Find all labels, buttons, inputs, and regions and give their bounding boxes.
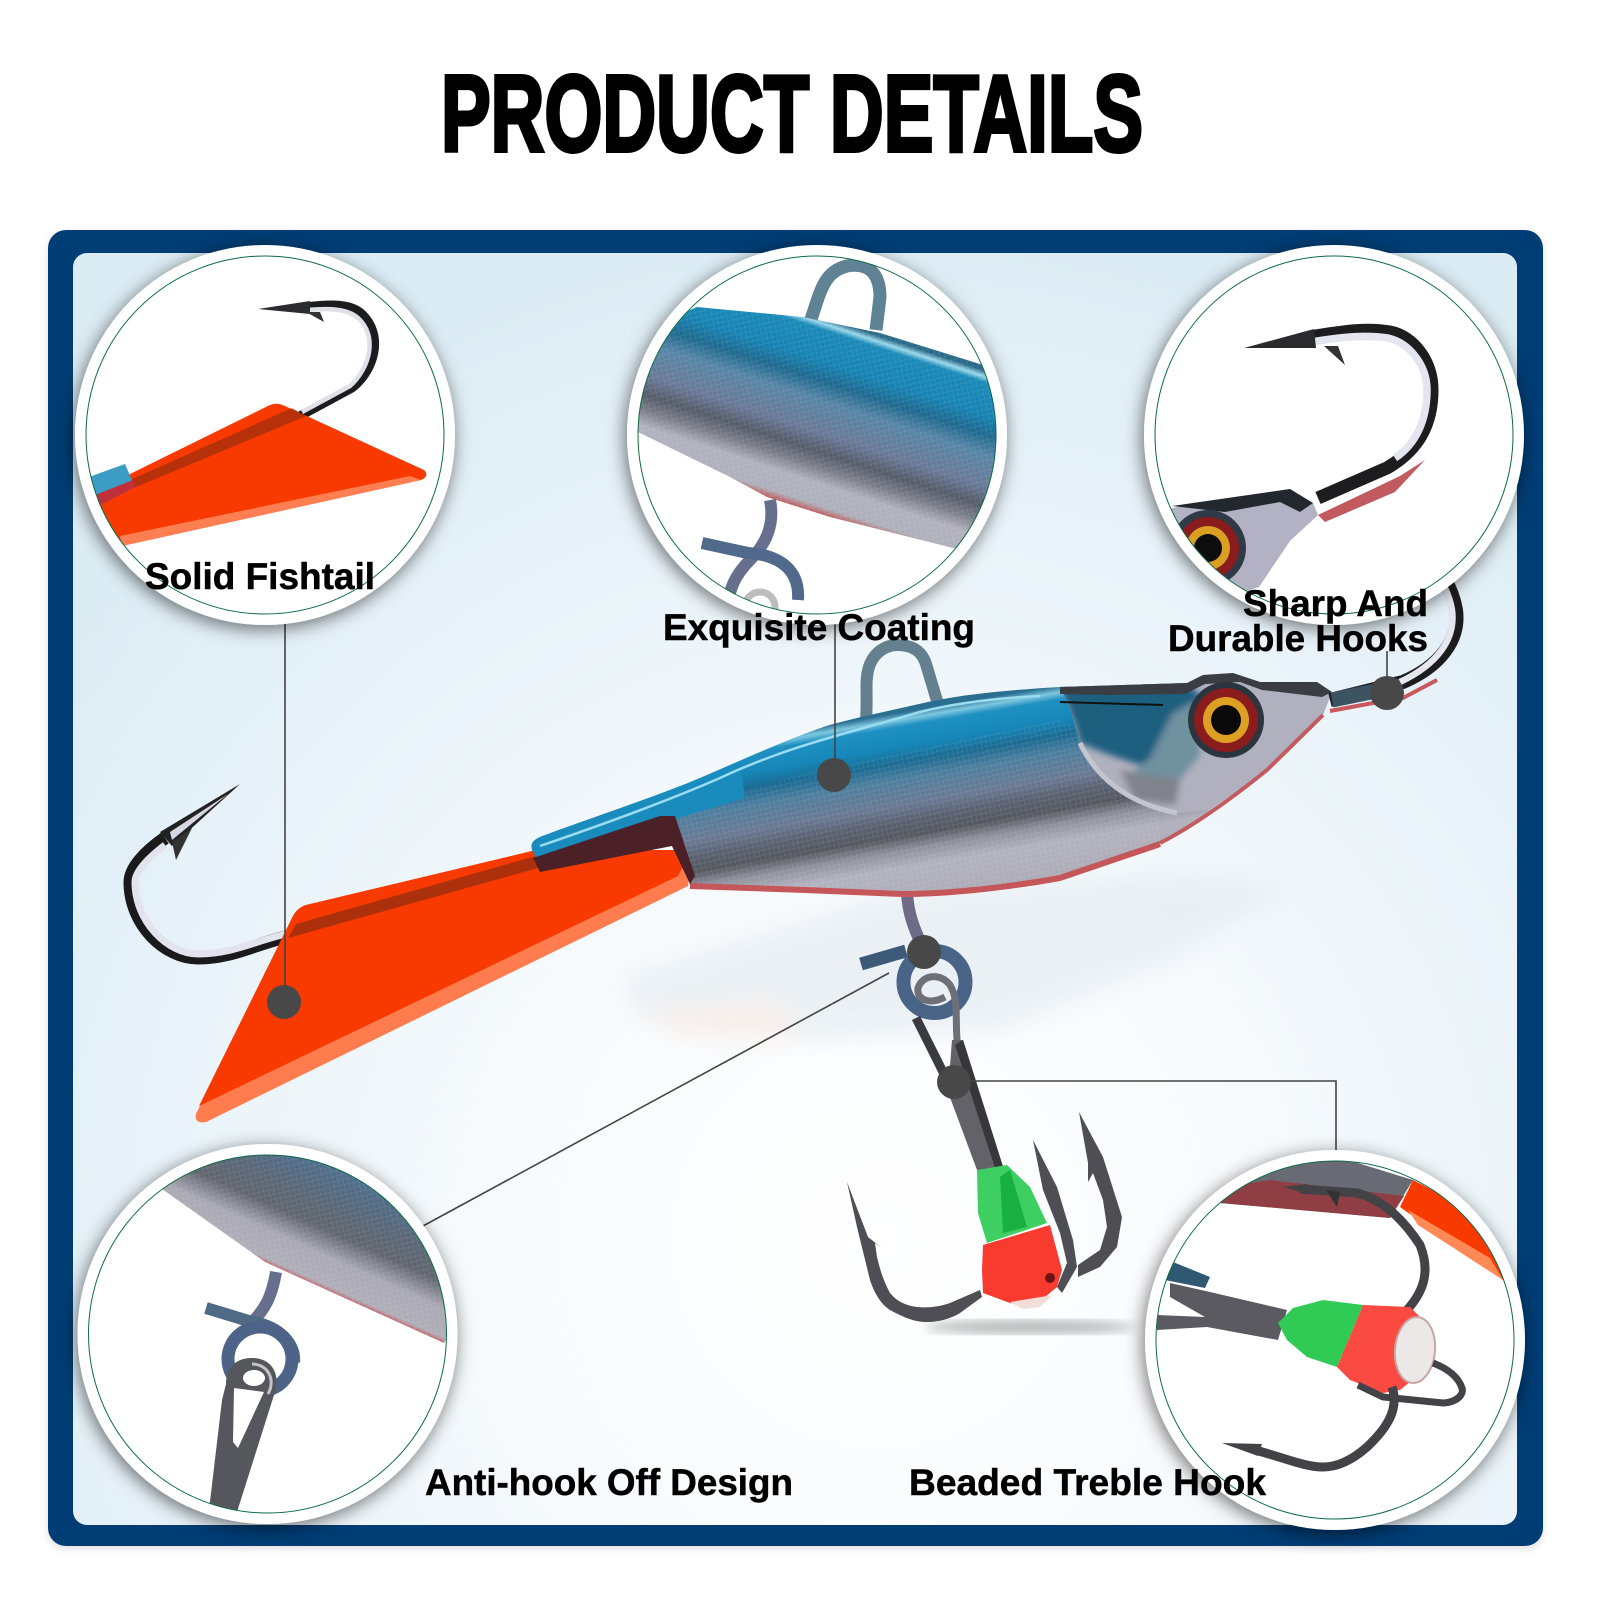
panel: solid fishtail circle (75, 245, 455, 625)
panel: navy frame and background (48, 230, 1543, 1546)
lure: main product (130, 578, 1457, 1122)
label: anti-hook off design: Anti-hook Off Design (425, 1462, 793, 1503)
callout line: anti-hook off (423, 973, 889, 1226)
treble close-up body (1220, 1162, 1413, 1218)
treble hook (847, 977, 1135, 1334)
coating wire (702, 500, 798, 622)
treble close-up fin (1400, 1180, 1503, 1280)
bead green (1278, 1300, 1363, 1367)
marker dots (267, 676, 1404, 1099)
tail fin (196, 850, 692, 1122)
bead gem (1392, 1315, 1438, 1385)
treble shadow (925, 1320, 1135, 1334)
body (531, 683, 1210, 893)
fishtail stub (89, 464, 135, 505)
anti-hook wire (206, 1272, 294, 1391)
label: beaded treble hook: Beaded Treble Hook (909, 1462, 1266, 1503)
label: sharp and durable hooks: Durable Hooks (1168, 618, 1428, 659)
callout line: fishtail (284, 622, 286, 1002)
fishtail fin (97, 404, 426, 546)
label: sharp and durable hooks: Sharp And (1243, 583, 1428, 624)
panel: anti-hook off circle (78, 1130, 470, 1524)
label: solid fishtail: Solid Fishtail (145, 556, 375, 597)
belly close-up (162, 1156, 446, 1343)
anti-hook shank (209, 1358, 277, 1512)
lure reflection (622, 872, 1290, 1040)
fishtail hook (300, 305, 375, 416)
callout line: sharp hooks (1386, 651, 1388, 693)
bead red (982, 1225, 1062, 1307)
bead green (977, 1165, 1047, 1243)
coating eyelet (810, 265, 880, 330)
lateral mark (1060, 702, 1163, 705)
bead red (1337, 1305, 1425, 1393)
head (1060, 673, 1332, 813)
belly edge (1160, 715, 1323, 843)
sharp hook (1310, 330, 1432, 498)
coating body (638, 307, 996, 548)
treble eye and struts (916, 977, 958, 1098)
top eyelet (866, 645, 938, 720)
eye close-up (1179, 510, 1246, 580)
callout line: coating (834, 622, 836, 775)
treble shank (948, 1040, 1005, 1173)
head shading (1055, 683, 1205, 805)
panel: exquisite coating circle (610, 245, 1010, 625)
panel: sharp hooks circle (1144, 245, 1524, 625)
front hook (1330, 578, 1457, 711)
label: exquisite coating: Exquisite Coating (663, 607, 975, 648)
treble close-up stub and shank (1165, 1262, 1210, 1288)
treble close-up lower hooks (1255, 1363, 1462, 1467)
belly wire and ring (861, 892, 966, 1013)
title: PRODUCT DETAILS (441, 53, 1143, 175)
treble close-up upper hook (1300, 1189, 1425, 1310)
head top dark strip (1060, 673, 1332, 697)
eye (1188, 682, 1264, 758)
gill (1080, 743, 1177, 813)
treble prongs (847, 1112, 1122, 1322)
dorsal tab shadow (533, 816, 695, 884)
mesh texture (671, 720, 1160, 893)
callout line: treble hook (954, 1081, 1336, 1160)
belly red edge (690, 844, 1160, 894)
blue dorsal tab (531, 762, 745, 866)
rear hook (130, 784, 286, 958)
label: sharp and durable hooks (1168, 583, 1428, 659)
head close-up (1172, 489, 1318, 591)
panel: beaded treble hook circle (1145, 1140, 1530, 1530)
